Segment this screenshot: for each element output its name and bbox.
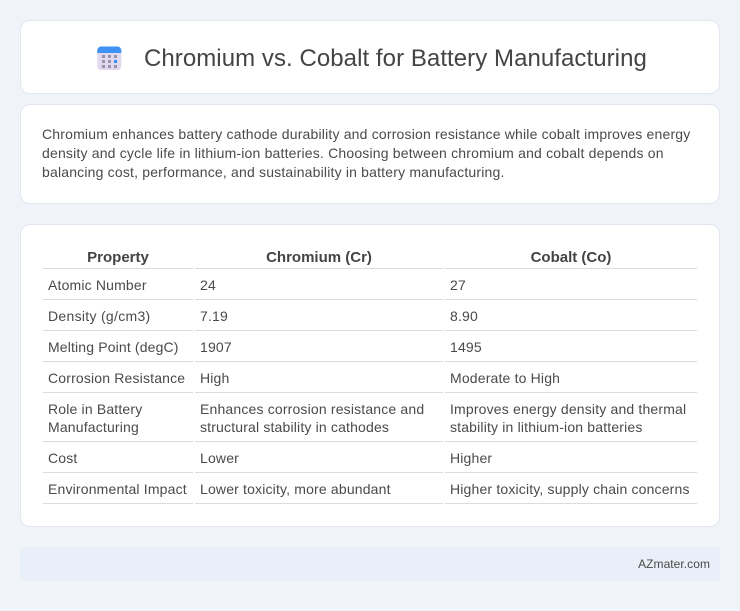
row: atomic number: 27 [450,277,466,293]
panel: comparison table [20,224,720,527]
row: environmental impact: Lower toxicity, more abundant [200,481,391,497]
icon: calendar [97,46,122,70]
row: role in battery manufacturing: Improves energy density and thermal [450,401,686,417]
panel: title card [20,20,720,94]
row: environmental impact [48,481,690,497]
row: cost: Lower [200,450,239,466]
row: melting point: 1907 [200,339,232,355]
row: role in battery manufacturing: stability in lithium-ion batteries [450,419,643,435]
row: cost: Cost [48,450,77,466]
row: cost [48,450,492,466]
summary text: balancing cost, performance, and sustainability in battery manufacturing. [42,164,505,180]
table header: Chromium (Cr) [266,249,372,266]
row: role in battery manufacturing: Enhances corrosion resistance and [200,401,424,417]
footer bar [20,547,720,581]
row: role in battery manufacturing [48,401,686,435]
row: environmental impact: Environmental Impact [48,481,187,497]
row: density [48,308,478,324]
row: density: 7.19 [200,308,228,324]
row: atomic number [48,277,466,293]
row: melting point: 1495 [450,339,482,355]
row: corrosion resistance: Corrosion Resistance [48,370,185,386]
summary text [42,126,690,180]
row: corrosion resistance: Moderate to High [450,370,560,386]
table header: Property [87,249,149,266]
table header: Cobalt (Co) [531,249,611,266]
footer source text: AZmater.com [638,557,710,571]
row: cost: Higher [450,450,492,466]
row: environmental impact: Higher toxicity, supply chain concerns [450,481,690,497]
row: atomic number: 24 [200,277,216,293]
row: melting point [48,339,482,355]
panel: summary [20,104,720,204]
summary text: density and cycle life in lithium-ion batteries. Choosing between chromium and cobalt depends on [42,145,664,161]
row: role in battery manufacturing: Role in Battery [48,401,142,417]
row: atomic number: Atomic Number [48,277,147,293]
row: role in battery manufacturing: structural stability in cathodes [200,419,389,435]
row: density: Density (g/cm3) [48,308,151,324]
row: corrosion resistance: High [200,370,229,386]
row: role in battery manufacturing: Manufacturing [48,419,139,435]
row: corrosion resistance [48,370,560,386]
table header [87,249,611,266]
summary text: Chromium enhances battery cathode durability and corrosion resistance while cobalt improves energy [42,126,690,142]
title: Chromium vs. Cobalt for Battery Manufacturing [144,45,647,72]
row: melting point: Melting Point (degC) [48,339,179,355]
row: density: 8.90 [450,308,478,324]
